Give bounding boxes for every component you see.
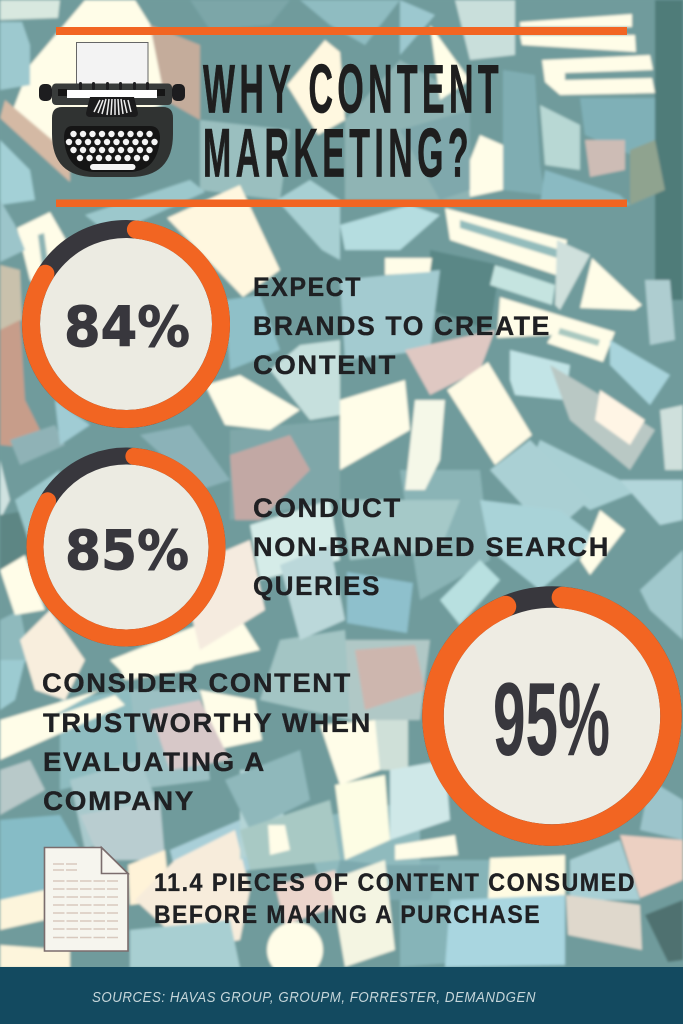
text: conduct non-branded search queries: CONDUCT [253, 493, 402, 523]
text: expect brands to create content: BRANDS TO CREATE [253, 311, 551, 341]
donut: 95% [433, 597, 671, 835]
text: consider content trustworthy: CONSIDER CONTENT [42, 668, 352, 698]
text: 11.4 pieces of content: BEFORE MAKING A PURCHASE [154, 901, 541, 929]
icon: document [44, 848, 128, 951]
donut: 85% [35, 456, 217, 638]
text: conduct non-branded search queries: QUERIES [253, 571, 381, 601]
bottom title rule [56, 200, 627, 207]
donut: 85%: 85% [65, 519, 189, 582]
text: 11.4 pieces of content [154, 869, 636, 929]
text: expect brands to create content: CONTENT [253, 350, 397, 380]
text: expect brands to create content [253, 272, 551, 380]
text: consider content trustworthy [42, 668, 372, 816]
text: consider content trustworthy: COMPANY [43, 786, 195, 816]
footer sources: SOURCES: HAVAS GROUP, GROUPM, FORRESTER, DEMANDGEN [92, 989, 536, 1006]
donut: 84% [31, 229, 221, 419]
top orange rule [56, 27, 627, 35]
text: 11.4 pieces of content: 11.4 PIECES OF CONTENT CONSUMED [154, 869, 636, 897]
donut: 84%: 84% [64, 295, 190, 359]
text: conduct non-branded search queries: NON-BRANDED SEARCH [253, 532, 610, 562]
text: expect brands to create content: EXPECT [253, 272, 362, 302]
title [203, 50, 503, 192]
text: consider content trustworthy: EVALUATING A [43, 747, 266, 777]
text: conduct non-branded search queries [253, 493, 610, 601]
text: consider content trustworthy: TRUSTWORTHY WHEN [43, 708, 372, 738]
footer band [0, 967, 683, 1024]
icon: typewriter [39, 42, 185, 177]
